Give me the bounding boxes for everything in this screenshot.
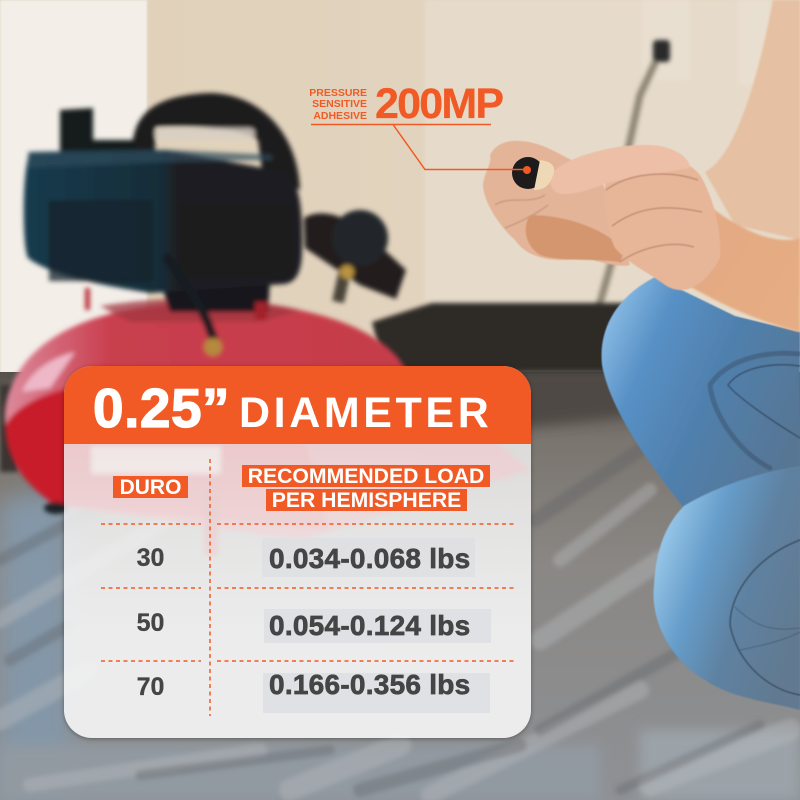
- row: duro 50: 50: [137, 609, 164, 637]
- floor: [0, 368, 800, 800]
- stem and small red part: [160, 280, 270, 312]
- regulator: [304, 213, 406, 299]
- compressor: [5, 93, 530, 556]
- heading value: 0.25”: [93, 377, 230, 439]
- dashed dividers: [101, 459, 514, 716]
- adhesive hemisphere product: [512, 157, 554, 190]
- upper knee: [602, 277, 800, 508]
- callout label: PRESSURE: [309, 87, 367, 99]
- callout value: 200MP: [375, 80, 502, 128]
- person: jeans: [602, 277, 800, 710]
- header line one: RECOMMENDED LOAD: [248, 465, 484, 488]
- header band: [64, 366, 531, 444]
- column header: recommended load: [242, 465, 490, 512]
- value 70: 0.166-0.356 lbs: [269, 669, 470, 700]
- person: arm: [650, 0, 800, 332]
- lower knee: [653, 466, 800, 710]
- motor housing: [24, 150, 302, 293]
- panel: load table: [64, 366, 531, 738]
- row: duro 70: 70: [137, 673, 164, 701]
- header line two: PER HEMISPHERE: [272, 489, 461, 512]
- callout label: ADHESIVE: [313, 110, 367, 122]
- value 30: 0.034-0.068 lbs: [269, 543, 470, 574]
- red tank: [5, 302, 530, 540]
- value backgrounds: [262, 538, 491, 713]
- person: hands: [483, 141, 720, 290]
- callout label: [309, 87, 367, 122]
- callout: pressure sensitive adhesive: [309, 80, 531, 174]
- wheel shadow: [44, 502, 68, 514]
- wall: [0, 0, 800, 400]
- column header: duro: DURO: [120, 476, 181, 499]
- row: duro 30: 30: [137, 544, 164, 572]
- value 50: 0.054-0.124 lbs: [269, 610, 470, 641]
- wall plug and cable: [598, 40, 670, 310]
- callout leader line: [311, 124, 531, 174]
- heading word: DIAMETER: [239, 389, 492, 437]
- callout label: SENSITIVE: [312, 98, 367, 110]
- knee stitching: [730, 540, 800, 695]
- tag reflected under panel: [92, 447, 220, 473]
- baseboard: [372, 303, 640, 372]
- pocket stitching: [710, 353, 800, 468]
- handle: [132, 93, 300, 190]
